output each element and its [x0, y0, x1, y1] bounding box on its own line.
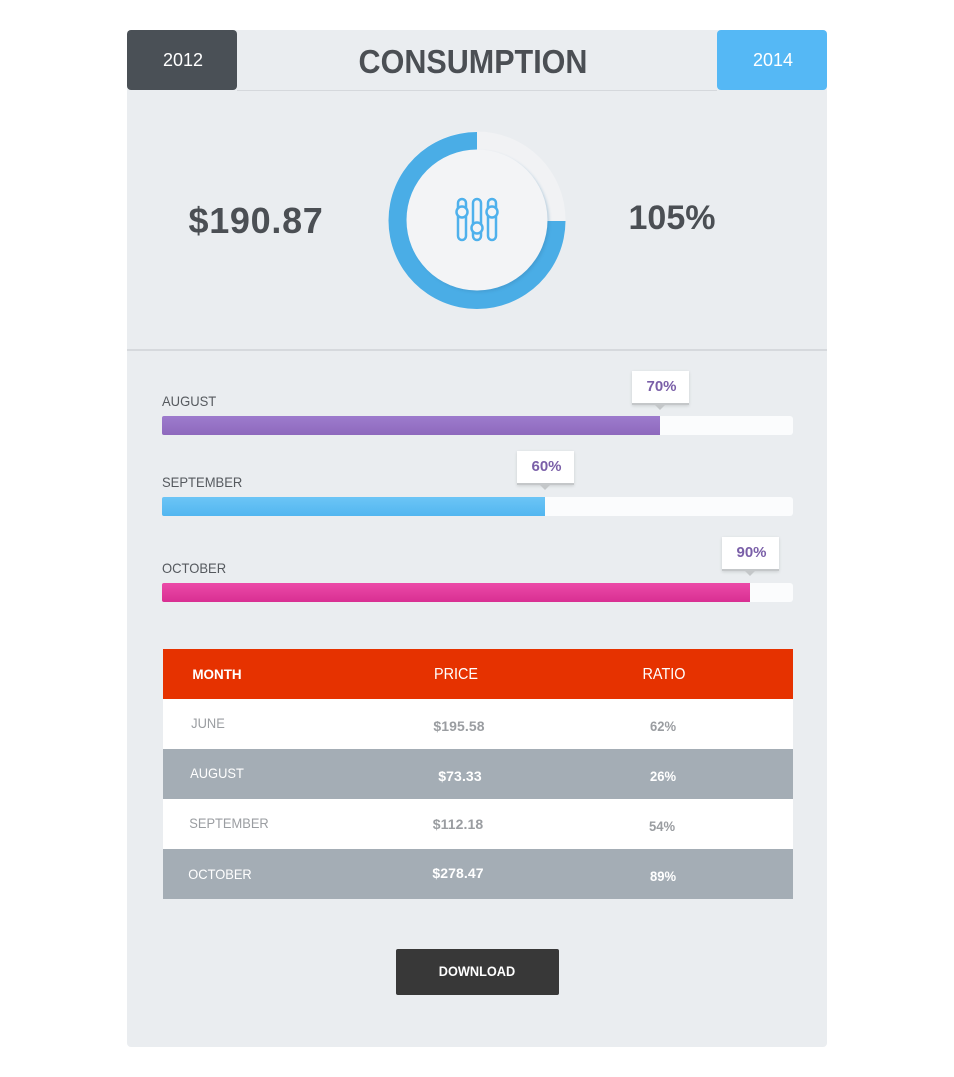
- tooltip: 70%: [632, 371, 689, 405]
- label: october: OCTOBER: [162, 560, 226, 576]
- row: august: 26%: [650, 768, 676, 784]
- row: september: SEPTEMBER: [189, 815, 269, 831]
- icon: sliders: [456, 199, 498, 240]
- table: [163, 649, 793, 899]
- label: september: SEPTEMBER: [162, 474, 242, 490]
- stat: percentage: 105%: [629, 199, 715, 237]
- row: october: [163, 849, 793, 899]
- tooltip: 60%: [517, 451, 574, 485]
- tooltip: 60%: 60%: [531, 458, 562, 475]
- row: october: $278.47: [432, 865, 484, 881]
- row: october: 89%: [650, 868, 676, 884]
- button: 2014: 2014: [753, 50, 793, 70]
- stat: amount: $190.87: [188, 200, 324, 241]
- row: october: OCTOBER: [188, 866, 252, 882]
- table header: RATIO: [643, 666, 685, 683]
- row: august: AUGUST: [190, 765, 244, 781]
- bar: september: [162, 497, 793, 516]
- tooltip: 70%: 70%: [646, 378, 677, 395]
- button: download: DOWNLOAD: [439, 963, 515, 979]
- button: 2014: [717, 30, 827, 90]
- row: june: [163, 699, 793, 749]
- table header: MONTH: [192, 666, 242, 682]
- row: september: $112.18: [433, 816, 483, 832]
- row: august: [163, 749, 793, 799]
- row: september: 54%: [649, 818, 675, 834]
- panel: consumption card: [127, 30, 827, 1047]
- section divider: [127, 349, 827, 351]
- bar: august: [162, 416, 793, 435]
- label: august: AUGUST: [162, 393, 216, 409]
- row: june: 62%: [650, 718, 676, 734]
- table header: [163, 649, 793, 699]
- row: june: $195.58: [433, 718, 485, 734]
- row: september: [163, 799, 793, 849]
- row: june: JUNE: [191, 715, 225, 731]
- table header: PRICE: [434, 666, 478, 683]
- row: august: $73.33: [438, 768, 482, 784]
- button: 2012: [127, 30, 237, 90]
- button: 2012: 2012: [163, 50, 203, 70]
- title: CONSUMPTION: [359, 43, 587, 80]
- tooltip: 90%: 90%: [736, 544, 767, 561]
- button: download: [396, 949, 559, 995]
- tooltip: 90%: [722, 537, 779, 571]
- bar: october: [162, 583, 793, 602]
- header divider: [237, 90, 717, 91]
- donut chart: [388, 132, 566, 309]
